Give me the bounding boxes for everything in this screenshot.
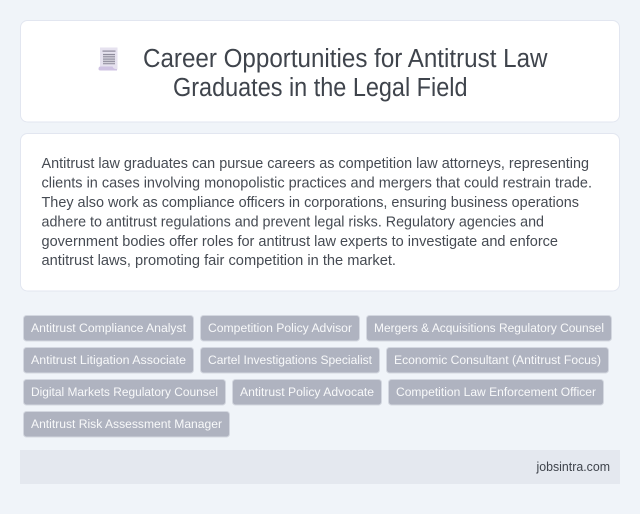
tag: Cartel Investigations Specialist <box>200 348 380 373</box>
tag: Antitrust Litigation Associate <box>24 348 194 373</box>
tag: Mergers & Acquisitions Regulatory Counsel <box>366 316 612 341</box>
description text: They also work as compliance officers in corporations, ensuring business operations <box>42 195 579 211</box>
description text <box>42 156 592 269</box>
panel: header <box>20 20 620 122</box>
tag: Competition Policy Advisor <box>200 316 360 341</box>
footer source: jobsintra.com <box>536 460 610 474</box>
tag: Antitrust Policy Advocate: Antitrust Policy Advocate <box>240 385 374 399</box>
description text: clients in cases involving monopolistic practices and mergers that could restrain trade. <box>42 176 592 192</box>
description text: government bodies offer roles for antitrust law experts to investigate and enforce <box>42 234 558 250</box>
title: Career Opportunities for Antitrust Law <box>143 45 548 73</box>
icon: legal document scroll <box>98 48 118 70</box>
tag: Antitrust Risk Assessment Manager <box>24 412 230 437</box>
tag: Antitrust Compliance Analyst: Antitrust Compliance Analyst <box>31 321 187 335</box>
description text: antitrust laws, promoting fair competition in the market. <box>42 253 396 269</box>
tag: Cartel Investigations Specialist: Cartel Investigations Specialist <box>208 353 373 367</box>
tag: Digital Markets Regulatory Counsel: Digital Markets Regulatory Counsel <box>31 385 218 399</box>
tag: Economic Consultant (Antitrust Focus) <box>386 348 608 373</box>
tag: Competition Law Enforcement Officer: Competition Law Enforcement Officer <box>396 385 596 399</box>
tag: Digital Markets Regulatory Counsel <box>24 380 226 405</box>
tag: Antitrust Policy Advocate <box>232 380 382 405</box>
description text: adhere to antitrust regulations and prevent legal risks. Regulatory agencies and <box>42 214 544 230</box>
title: Graduates in the Legal Field <box>173 74 468 102</box>
tag: Antitrust Risk Assessment Manager: Antitrust Risk Assessment Manager <box>31 417 222 431</box>
tag: Antitrust Compliance Analyst <box>24 316 194 341</box>
tag: Economic Consultant (Antitrust Focus): Economic Consultant (Antitrust Focus) <box>394 353 601 367</box>
tag: Antitrust Litigation Associate: Antitrust Litigation Associate <box>31 353 186 367</box>
tag: Competition Law Enforcement Officer <box>388 380 604 405</box>
tag: Mergers & Acquisitions Regulatory Counsel: Mergers & Acquisitions Regulatory Counsel <box>374 321 604 335</box>
panel: description <box>20 134 620 291</box>
title <box>143 45 548 102</box>
career tags <box>24 316 612 437</box>
description text: Antitrust law graduates can pursue careers as competition law attorneys, representing <box>42 156 589 172</box>
footer bar <box>20 450 620 484</box>
tag: Competition Policy Advisor: Competition Policy Advisor <box>208 321 352 335</box>
